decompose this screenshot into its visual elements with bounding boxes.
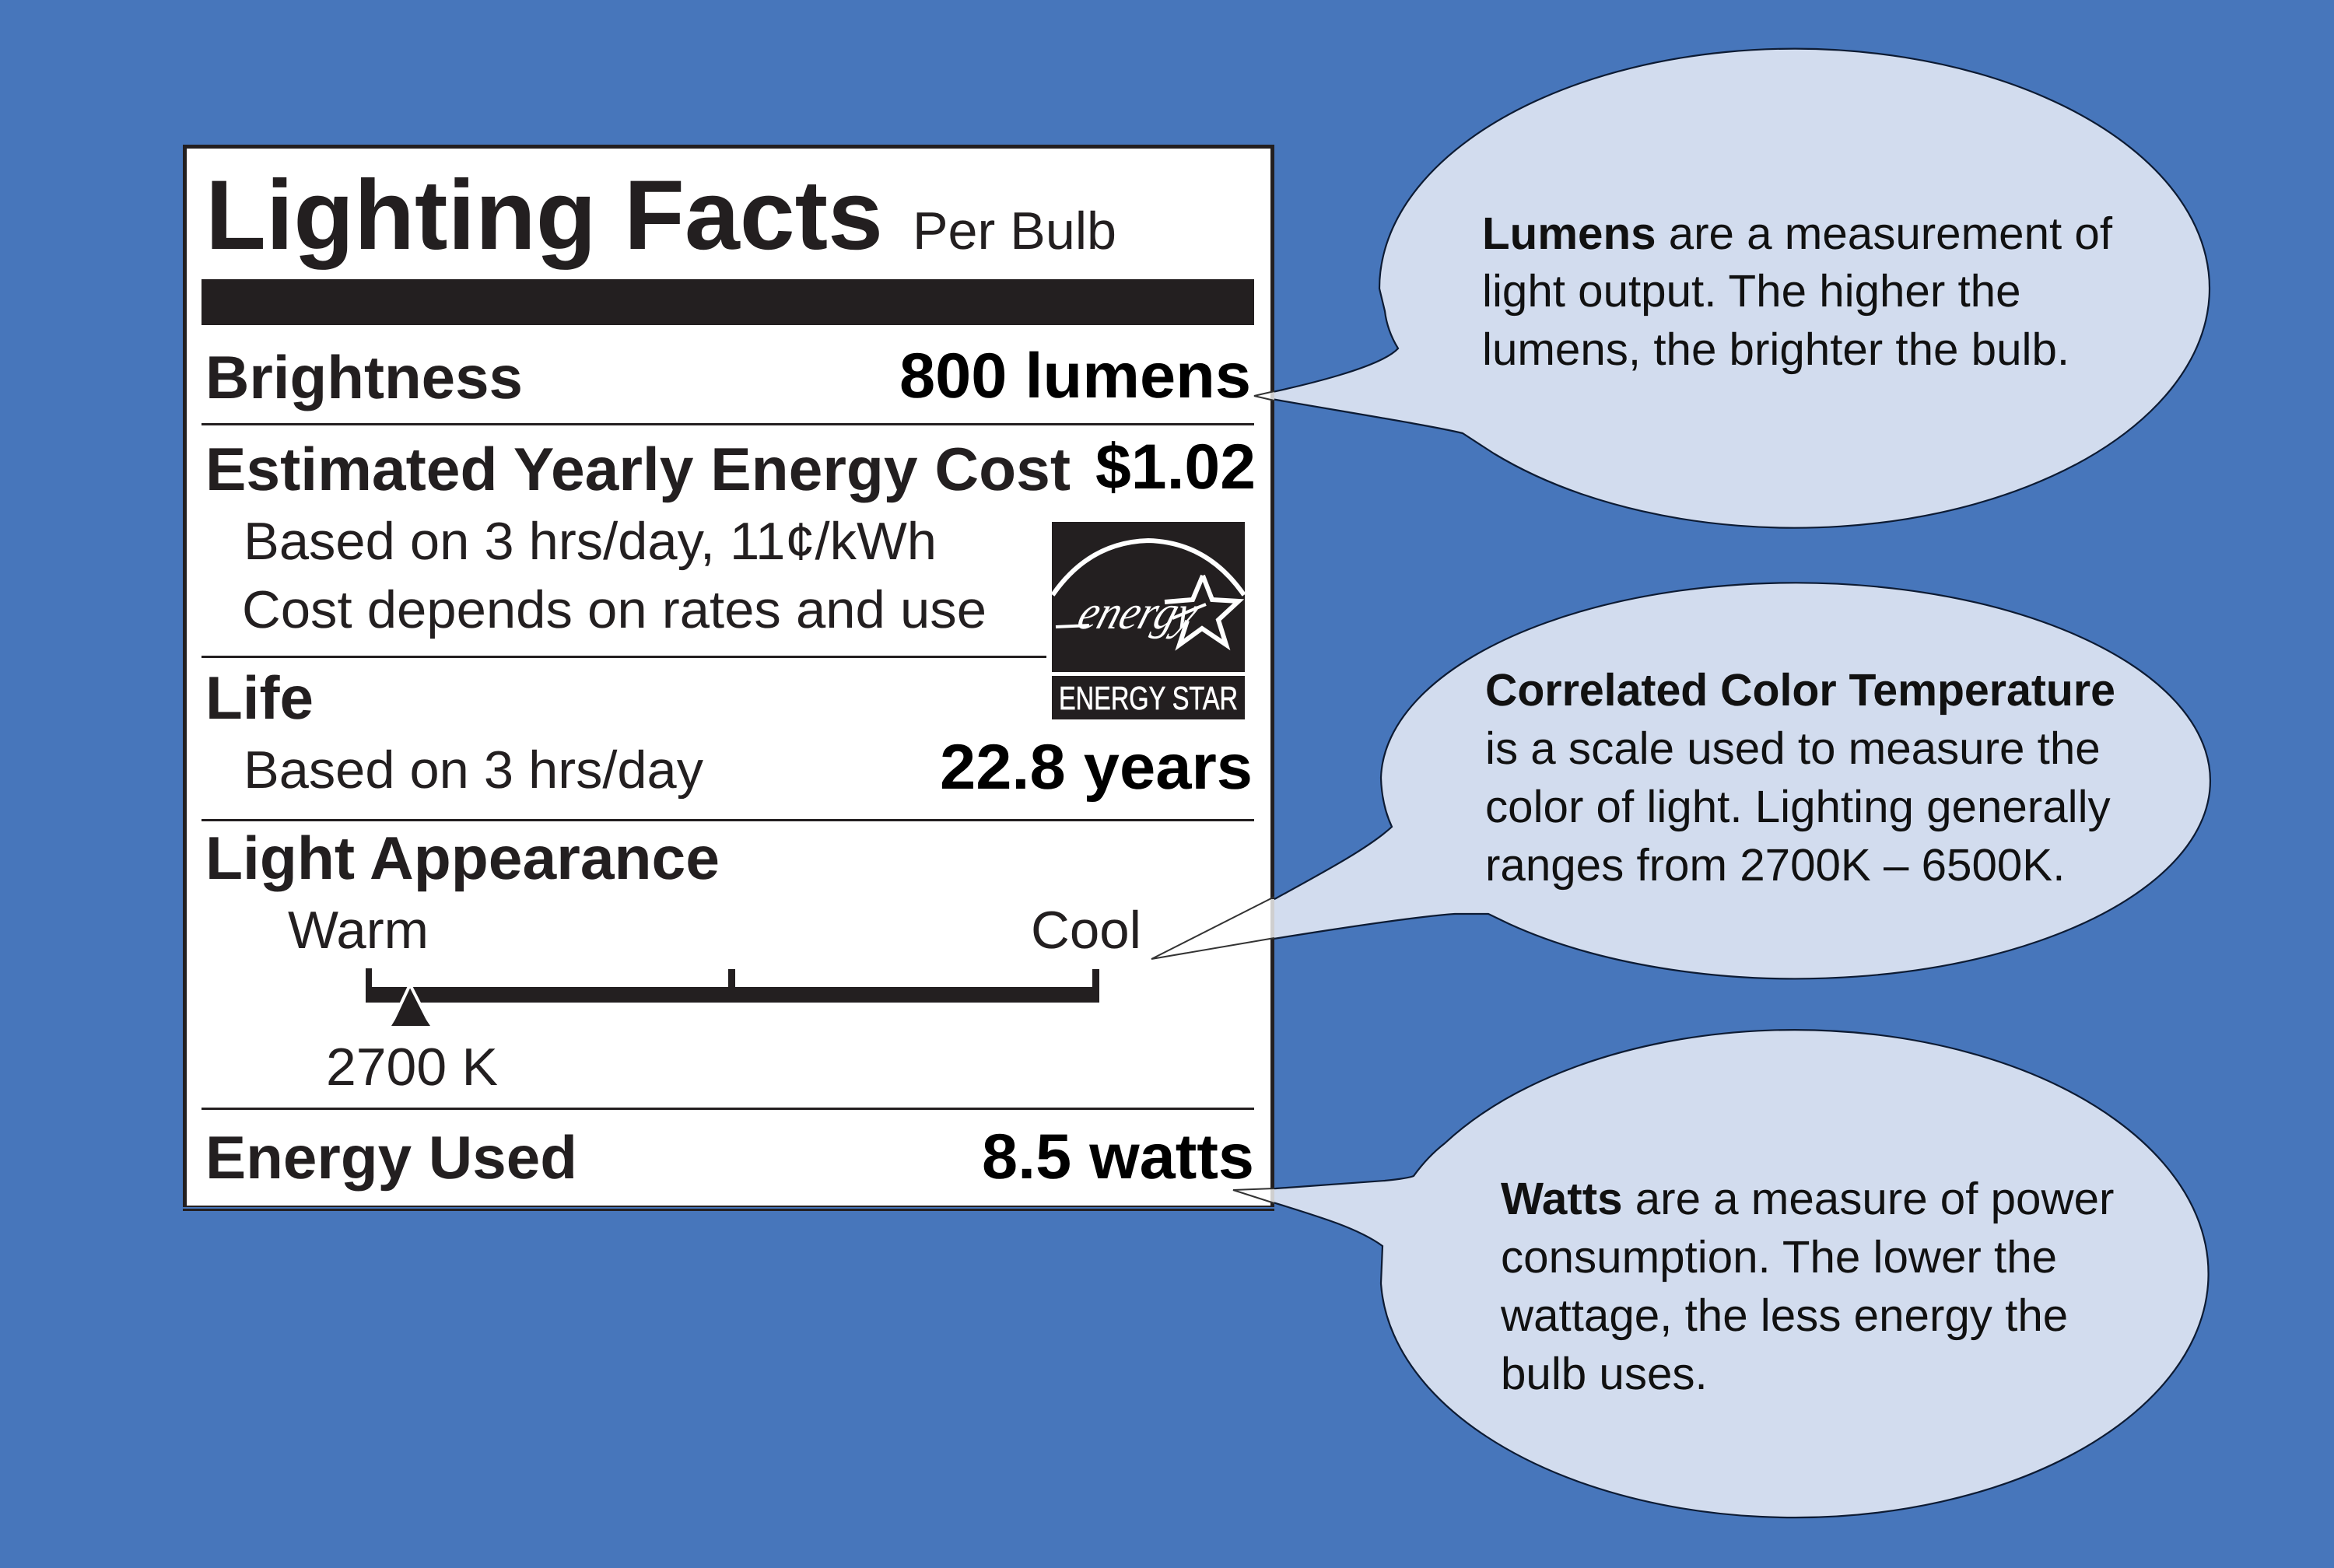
scale: warm to cool: Cool (1031, 901, 1141, 960)
callout: lumens: light output. The higher the (1482, 266, 2021, 317)
row: brightness: 800 lumens (899, 341, 1251, 411)
row: energy used: 8.5 watts (982, 1122, 1254, 1192)
subtitle: Per Bulb (913, 201, 1116, 261)
callout: correlated color temperature: ranges from 2700K – 6500K. (1485, 840, 2065, 891)
icon: energy star logo: ENERGY STAR (1059, 680, 1238, 716)
row: brightness: Brightness (205, 343, 523, 411)
row: estimated yearly energy cost: Estimated Yearly Energy Cost (205, 435, 1071, 503)
scale: warm to cool: 2700 K (326, 1038, 498, 1097)
row: energy used: Energy Used (205, 1123, 577, 1192)
row: energy used (205, 1122, 1254, 1192)
callout: watts: wattage, the less energy the (1500, 1290, 2068, 1341)
callout: watts (1233, 1030, 2209, 1517)
panel: lighting facts label (183, 145, 1274, 1211)
callout: watts: Watts are a measure of power (1501, 1174, 2114, 1224)
callout: lumens: Lumens are a measurement of (1482, 208, 2113, 259)
row: brightness (205, 341, 1251, 411)
icon: energy star logo: energy (1071, 586, 1206, 639)
callout: lumens: lumens, the brighter the bulb. (1482, 324, 2069, 375)
icon: energy star logo (1052, 522, 1245, 719)
scale: warm to cool (288, 901, 1141, 1097)
callout: correlated color temperature: is a scale used to measure the (1485, 723, 2101, 774)
title: Lighting Facts (205, 159, 883, 270)
callout: correlated color temperature: Correlated Color Temperature (1485, 665, 2115, 716)
callout: correlated color temperature (1151, 583, 2210, 978)
row: estimated yearly energy cost (205, 432, 1256, 639)
callout: correlated color temperature: color of light. Lighting generally (1485, 782, 2111, 832)
row: life: Life (205, 663, 314, 732)
row: estimated yearly energy cost: Based on 3 hrs/day, 11¢/kWh (244, 512, 937, 571)
callout: watts: bulb uses. (1501, 1349, 1708, 1399)
scale: warm to cool: Warm (288, 901, 429, 960)
callout: watts: consumption. The lower the (1501, 1232, 2057, 1283)
callout pointer tails over label (1151, 391, 1274, 1203)
row: estimated yearly energy cost: Cost depends on rates and use (242, 580, 987, 639)
row: life: 22.8 years (940, 732, 1253, 803)
callout: lumens (1254, 49, 2210, 528)
heading: light appearance: Light Appearance (205, 824, 720, 892)
row: estimated yearly energy cost: $1.02 (1095, 432, 1256, 502)
row: life: Based on 3 hrs/day (244, 740, 703, 800)
marker: 2700 K (390, 985, 432, 1027)
heavy bar (202, 279, 1254, 325)
row: life (205, 663, 1253, 803)
